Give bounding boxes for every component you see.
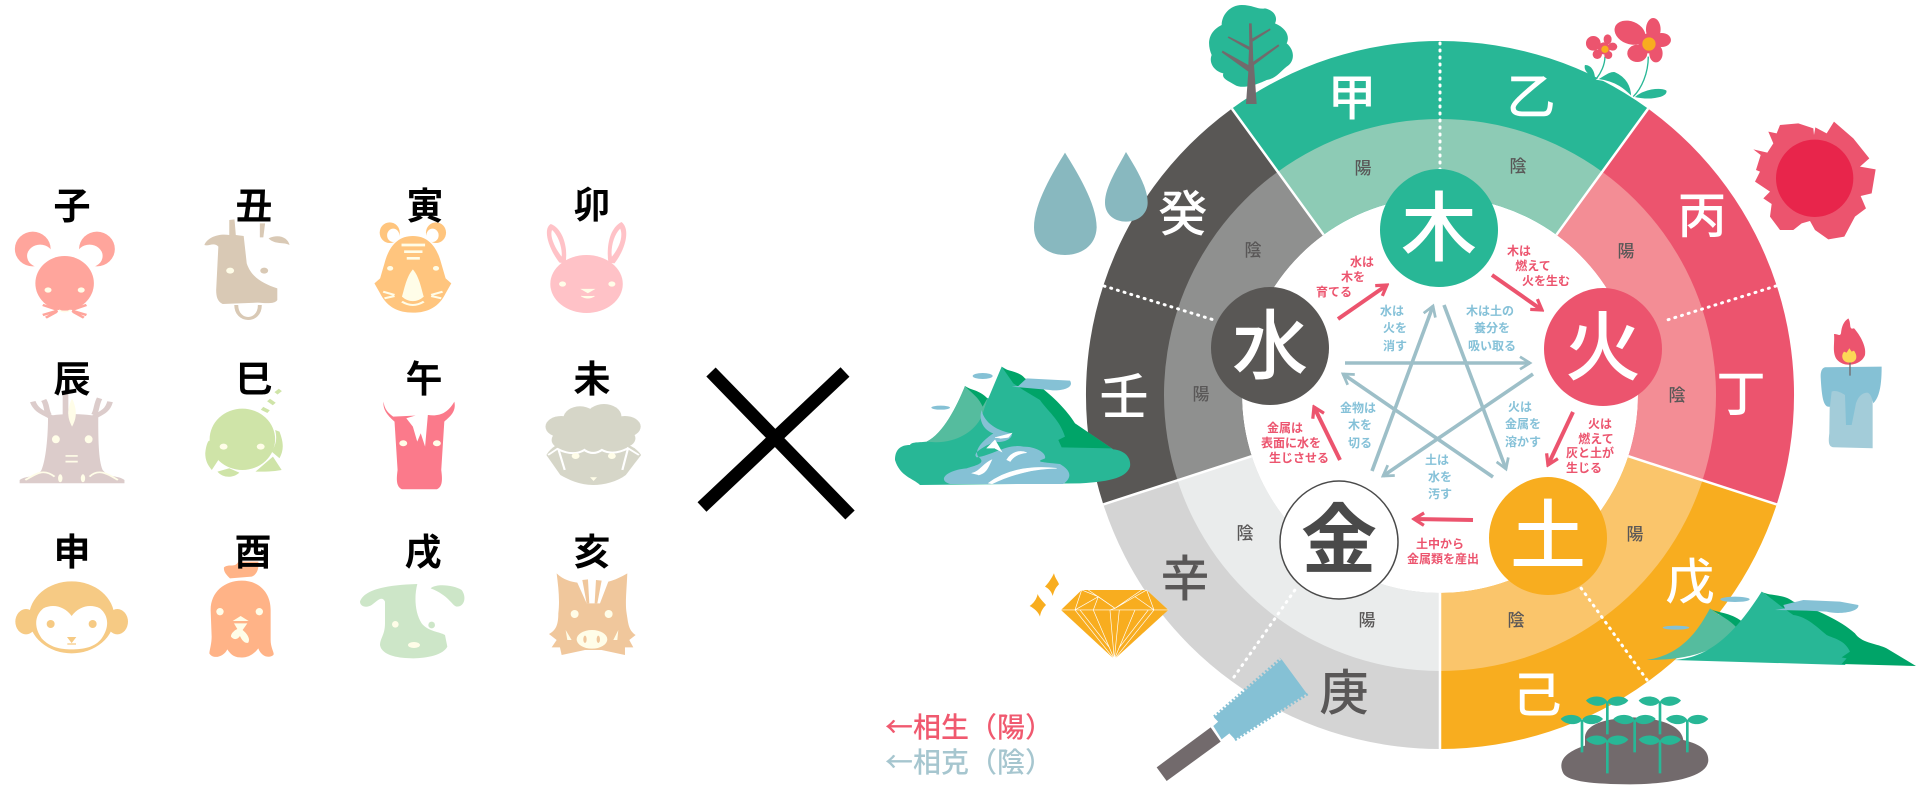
generating cycle captions: 土中から	[1416, 536, 1464, 551]
zodiac characters: 酉	[234, 532, 272, 573]
overcoming cycle captions: 切る	[1348, 436, 1372, 450]
zodiac characters: 巳	[236, 359, 272, 400]
overcoming cycle captions: 金物は	[1340, 400, 1376, 415]
heavenly stems	[1099, 71, 1766, 723]
panel: inner yin-yang ring	[1164, 119, 1716, 671]
generating cycle captions: 金属類を産出	[1407, 551, 1479, 566]
yin yang labels: 陰	[1244, 241, 1262, 260]
icon: rat	[15, 232, 115, 318]
yin yang labels: 陽	[1358, 611, 1376, 630]
yin yang labels: 陰	[1510, 157, 1526, 176]
heavenly stems: 戊	[1665, 556, 1715, 610]
icon: sun	[1753, 122, 1876, 239]
earth element: 土	[1510, 495, 1586, 580]
heavenly stems: 辛	[1160, 553, 1210, 607]
fire element: 火	[1565, 306, 1641, 391]
yin yang labels: 陽	[1618, 242, 1634, 261]
zodiac characters: 丑	[236, 186, 272, 227]
icon: ox	[204, 219, 290, 318]
icon: snake	[205, 390, 283, 477]
zodiac characters: 未	[574, 359, 610, 400]
metal element: 金	[1301, 499, 1377, 584]
overcoming cycle captions: 金属を	[1505, 416, 1541, 431]
overcoming cycle captions: 土は	[1425, 452, 1449, 467]
panel: metal segment	[1103, 456, 1440, 749]
icon: tree	[1209, 5, 1293, 104]
overcoming cycle captions: 水を	[1428, 469, 1452, 484]
icon: monkey	[15, 581, 128, 653]
overcoming cycle captions: 木を	[1348, 417, 1372, 432]
icon: boar	[549, 573, 636, 655]
icon: flowers	[1585, 16, 1671, 99]
yin yang labels: 陰	[1236, 524, 1254, 543]
overcoming cycle captions: 木は土の	[1466, 303, 1514, 318]
heavenly stems: 丙	[1677, 190, 1727, 244]
zodiac characters: 卯	[574, 185, 610, 226]
generating cycle captions: 木を	[1341, 269, 1365, 284]
panel: water segment	[1086, 109, 1324, 504]
icon: rooster	[209, 562, 274, 657]
legend: ←相生（陽）	[885, 706, 1053, 746]
overcoming cycle captions: 汚す	[1428, 486, 1452, 501]
zodiac characters: 子	[54, 186, 90, 227]
zodiac characters: 申	[54, 532, 90, 573]
icon: dog	[360, 584, 464, 658]
generating cycle captions	[1261, 243, 1614, 566]
zodiac characters: 辰	[54, 359, 90, 400]
zodiac characters: 寅	[406, 186, 444, 227]
heavenly stems: 庚	[1319, 667, 1369, 721]
water element: 水	[1232, 305, 1308, 390]
panel: wood segment	[1232, 41, 1648, 235]
generating cycle captions: 生じる	[1566, 460, 1602, 475]
overcoming cycle captions: 消す	[1383, 338, 1407, 353]
icon: saw	[1157, 659, 1308, 781]
yin yang labels: 陽	[1354, 159, 1372, 178]
zodiac characters: 午	[406, 359, 442, 400]
overcoming cycle captions: 養分を	[1474, 320, 1510, 335]
icon: horse	[383, 402, 455, 489]
chart: five elements wheel	[1086, 41, 1794, 749]
generating cycle captions: 木は	[1507, 243, 1531, 258]
heavenly stems: 壬	[1099, 371, 1149, 425]
arrows: generating cycle	[1314, 275, 1573, 520]
overcoming cycle captions: 火は	[1508, 400, 1532, 414]
wood element	[1380, 169, 1498, 287]
generating cycle captions: 金属は	[1267, 420, 1303, 435]
metal element	[1280, 481, 1398, 599]
icon: sheep	[545, 404, 641, 485]
icon: mountain on earth	[1647, 592, 1916, 666]
yin yang labels: 陰	[1508, 611, 1524, 630]
heavenly stems: 癸	[1158, 188, 1208, 242]
panel: fire segment	[1556, 109, 1794, 504]
overcoming cycle captions: 吸い取る	[1468, 339, 1516, 353]
zodiac characters	[54, 185, 610, 573]
fire element	[1544, 288, 1662, 406]
yin yang labels: 陽	[1192, 385, 1210, 404]
overcoming cycle captions: 水は	[1380, 303, 1404, 318]
generating cycle captions: 灰と土が	[1566, 445, 1614, 460]
icon: multiplication cross	[702, 372, 850, 515]
generating cycle captions: 表面に水を	[1261, 435, 1321, 450]
yin yang labels: 陰	[1668, 386, 1686, 405]
icon: water drops	[1034, 152, 1148, 255]
overcoming cycle captions: 火を	[1383, 321, 1407, 335]
yin yang labels	[1192, 157, 1686, 630]
generating cycle captions: 生じさせる	[1269, 450, 1329, 465]
generating cycle captions: 火を生む	[1522, 273, 1570, 288]
panel: earth segment	[1440, 456, 1777, 749]
overcoming cycle captions: 溶かす	[1505, 434, 1541, 449]
icon: diamond	[1030, 573, 1168, 659]
panel: twelve zodiac animals	[15, 185, 641, 658]
legend: ←相克（陰）	[885, 741, 1053, 781]
yin yang labels: 陽	[1626, 525, 1644, 544]
generating cycle captions: 火は	[1588, 417, 1612, 431]
heavenly stems: 甲	[1327, 72, 1377, 126]
icon: mountain with river	[895, 367, 1130, 485]
icon: sprouts in soil	[1561, 697, 1708, 784]
heavenly stems: 丁	[1716, 368, 1766, 422]
heavenly stems: 己	[1512, 669, 1562, 723]
zodiac characters: 戌	[404, 532, 442, 573]
water element	[1211, 287, 1329, 405]
generating cycle captions: 燃えて	[1578, 431, 1614, 446]
generating cycle captions: 水は	[1350, 254, 1374, 269]
zodiac characters: 亥	[574, 532, 610, 573]
icon: dragon	[20, 392, 124, 483]
overcoming cycle captions	[1340, 303, 1541, 501]
arrows: overcoming star	[1343, 305, 1533, 477]
generating cycle captions: 育てる	[1316, 284, 1352, 299]
heavenly stems: 乙	[1506, 71, 1556, 125]
icon: rabbit	[547, 222, 626, 313]
generating cycle captions: 燃えて	[1515, 258, 1551, 273]
legend	[885, 706, 1053, 781]
icon: candle	[1821, 318, 1882, 448]
icon: tiger	[374, 222, 451, 313]
wood element: 木	[1401, 187, 1477, 272]
earth element	[1489, 477, 1607, 595]
